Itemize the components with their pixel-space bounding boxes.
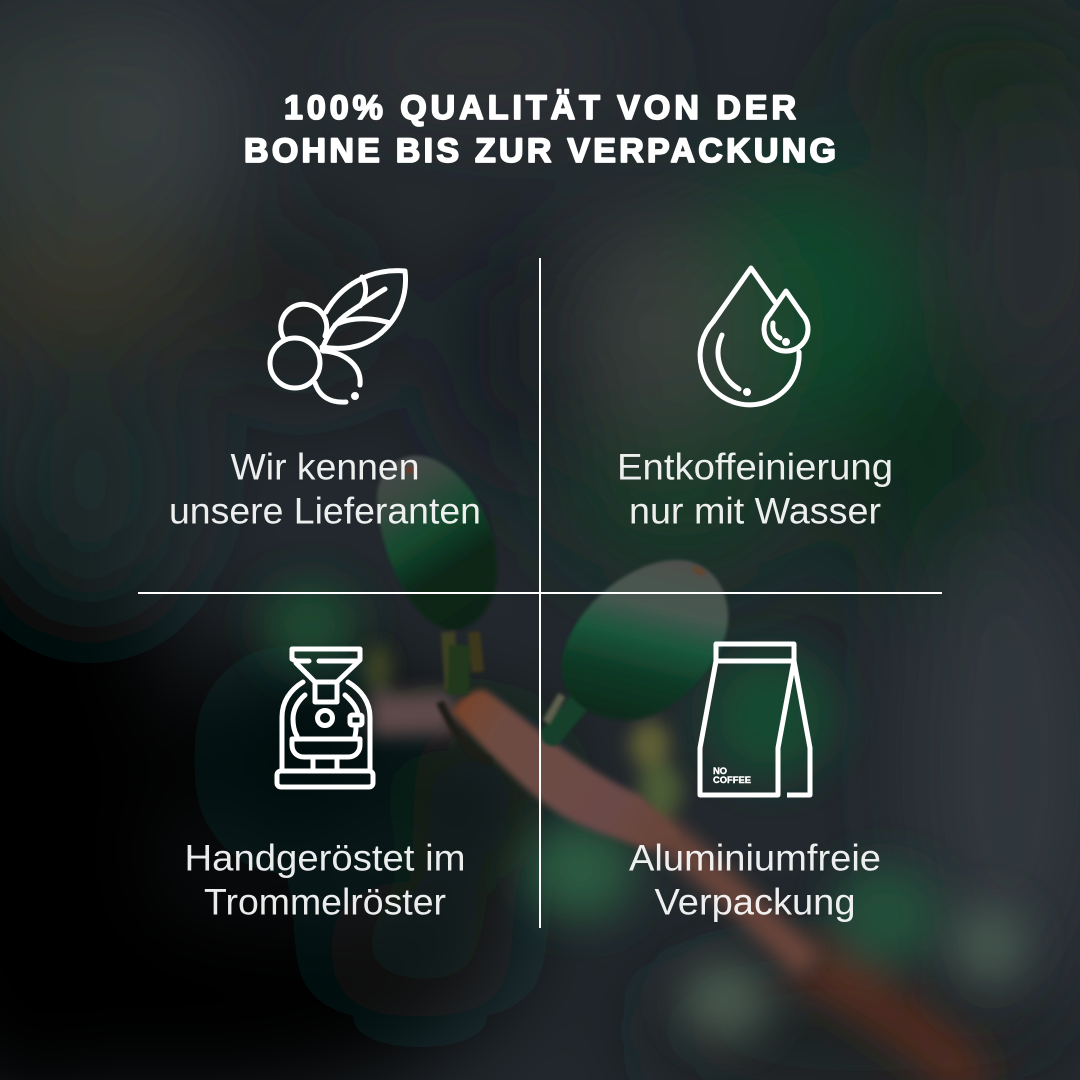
- label: roasting: [184, 838, 465, 922]
- coffee branch: [452, 690, 680, 850]
- icon: coffee bag: [700, 644, 810, 795]
- label: decaffeination: [617, 446, 893, 532]
- icon: drum roaster: [277, 649, 373, 787]
- label: packaging: Verpackung: [654, 882, 856, 922]
- label: suppliers: [169, 446, 481, 532]
- icon: coffee bag: NO: [713, 766, 727, 777]
- icon: coffee cherries with leaf: [270, 271, 406, 402]
- panel: roasting: [184, 649, 465, 922]
- label: packaging: [629, 838, 881, 922]
- label: decaffeination: nur mit Wasser: [629, 490, 881, 532]
- grid dividers: [138, 258, 942, 928]
- label: roasting: Handgeröstet im: [184, 838, 465, 878]
- label: roasting: Trommelröster: [204, 882, 446, 922]
- stems: [377, 456, 728, 762]
- title: [244, 89, 836, 170]
- icon: coffee bag: COFFEE: [713, 775, 751, 786]
- panel: suppliers: [169, 271, 481, 532]
- panel: packaging: [629, 644, 881, 922]
- label: packaging: Aluminiumfreie: [629, 838, 881, 878]
- title: 100% QUALITÄT VON DER: [284, 89, 796, 127]
- icon: water drops: [700, 268, 808, 405]
- panel: decaffeination: [617, 268, 893, 532]
- label: suppliers: unsere Lieferanten: [169, 490, 481, 532]
- title: BOHNE BIS ZUR VERPACKUNG: [244, 132, 836, 170]
- label: suppliers: Wir kennen: [230, 446, 420, 488]
- label: decaffeination: Entkoffeinierung: [617, 446, 893, 488]
